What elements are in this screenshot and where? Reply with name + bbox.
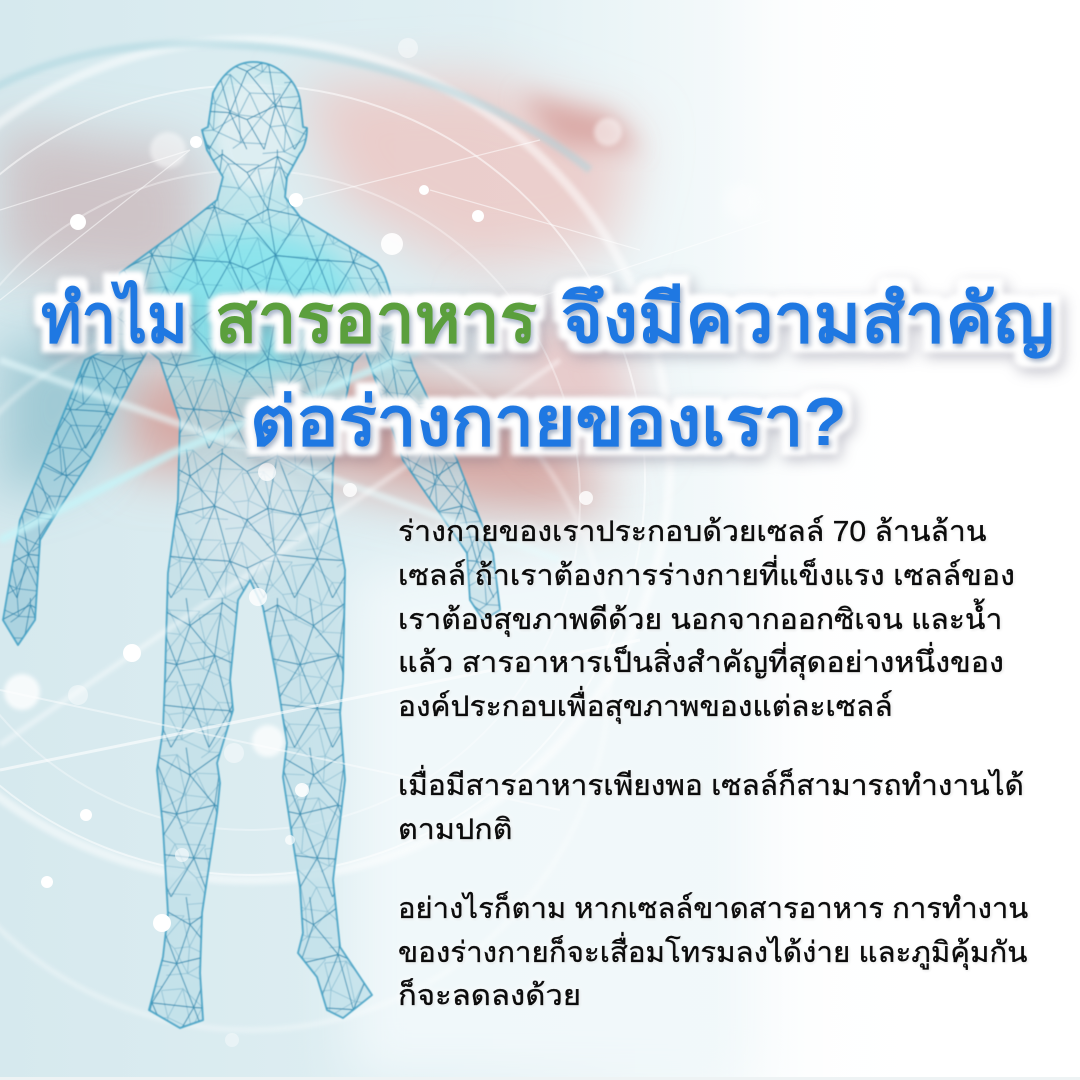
body text: ของร่างกายก็จะเสื่อมโทรมลงได้ง่าย และภูมิคุ้มกัน bbox=[398, 937, 1027, 969]
body text: เซลล์ ถ้าเราต้องการร่างกายที่แข็งแรง เซลล์ของ bbox=[398, 560, 1015, 592]
human body mesh bbox=[1, 60, 502, 1030]
body text bbox=[398, 515, 1029, 1012]
title line 1: สารอาหาร bbox=[215, 281, 537, 357]
body text: ตามปกติ bbox=[398, 814, 512, 846]
body text: องค์ประกอบเพื่อสุขภาพของแต่ละเซลล์ bbox=[398, 691, 893, 723]
body text: อย่างไรก็ตาม หากเซลล์ขาดสารอาหาร การทำงาน bbox=[398, 893, 1028, 925]
title line 1: จึงมีความสำคัญ bbox=[561, 281, 1054, 357]
body text: เราต้องสุขภาพดีด้วย นอกจากออกซิเจน และน้ำ bbox=[398, 604, 1002, 636]
title line 1 bbox=[32, 268, 1072, 380]
title line 1: ทำไม bbox=[41, 281, 188, 357]
light beams and network lines bbox=[0, 140, 770, 810]
title line 2: ต่อร่างกายของเรา? bbox=[250, 384, 847, 460]
glowing dots bbox=[4, 38, 760, 1047]
body text: เมื่อมีสารอาหารเพียงพอ เซลล์ก็สามารถทำงานได้ bbox=[398, 770, 1024, 802]
body text: แล้ว สารอาหารเป็นสิ่งสำคัญที่สุดอย่างหนึ่งของ bbox=[398, 647, 1004, 679]
bottom edge strip bbox=[0, 1077, 1080, 1080]
concentric arcs bbox=[0, 40, 670, 1030]
body text: ร่างกายของเราประกอบด้วยเซลล์ 70 ล้านล้าน bbox=[398, 516, 986, 548]
body text: ก็จะลดลงด้วย bbox=[398, 980, 581, 1012]
